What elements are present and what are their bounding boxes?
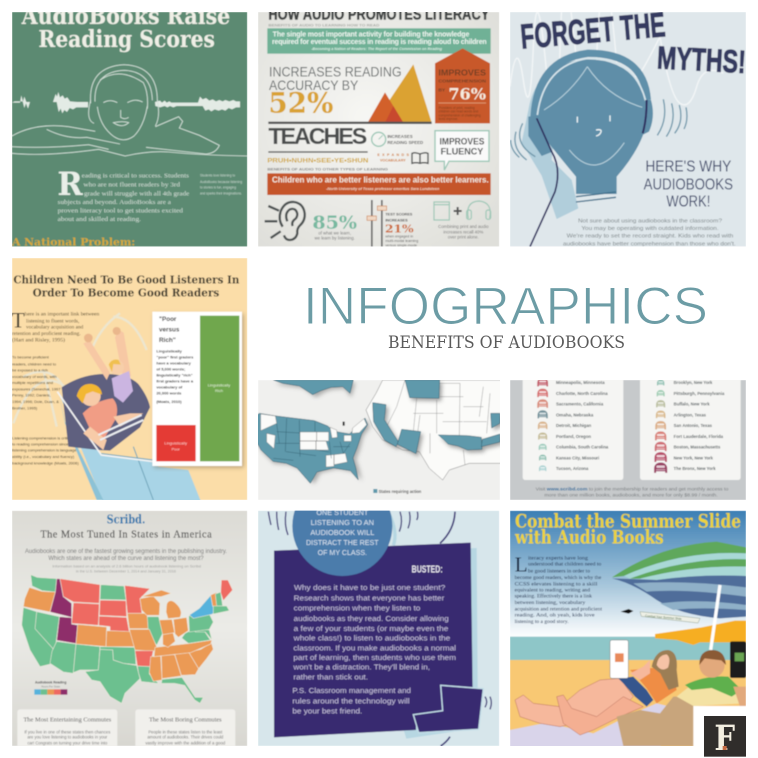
icon: print plus audio bbox=[434, 201, 491, 220]
text block: classroom note: We're ready to set the record straight. Kids who read with bbox=[567, 233, 733, 239]
label: busted: BUSTED: bbox=[412, 564, 443, 575]
panel: audiobooks raise reading scores bbox=[11, 2, 249, 248]
caption: print and audio bbox=[438, 224, 489, 240]
zig-zag corner bbox=[413, 685, 483, 733]
body text: speaking. Effectively there is a link bbox=[515, 593, 592, 600]
stat: reading accuracy 52% bbox=[268, 66, 402, 114]
drop cap: T bbox=[11, 307, 25, 332]
card: right city list: Fort Lauderdale, Florida bbox=[674, 434, 724, 439]
text block: reading is critical: about and skilled at reading. bbox=[58, 216, 141, 223]
bar: linguistically poor: Poor bbox=[171, 447, 181, 452]
chart: overlapping triangles bbox=[368, 64, 432, 123]
circle with myth text: AUDIOBOOK WILL bbox=[310, 528, 374, 537]
intro text: Which states are ahead of the curve and listening the most? bbox=[48, 556, 204, 562]
text block: listening comprehension: Listening comprehension is critical bbox=[12, 436, 73, 441]
text block: listening comprehension bbox=[12, 436, 79, 465]
callout: improves comprehension 76%: children can read words and bbox=[439, 110, 479, 114]
illustration: umbrella bbox=[612, 542, 746, 650]
heading: with Audio Books bbox=[514, 527, 664, 549]
subheading: BENEFITS OF AUDIO TO LEARNING HOW TO READ bbox=[268, 22, 379, 27]
card: most entertaining commutes: If you live in one of these states then chances bbox=[24, 729, 110, 734]
callout: improves comprehension 76%: BY bbox=[438, 88, 446, 94]
callout: improves comprehension 76%: texts improve. bbox=[439, 117, 458, 121]
graphic: sliders and 21% stat bbox=[367, 200, 418, 247]
stat: reading accuracy 52%: ACCURACY BY bbox=[269, 77, 359, 93]
body text: understood that children need to bbox=[528, 561, 601, 567]
bar: linguistically rich: Linguistically bbox=[208, 383, 230, 388]
illustration: pier bbox=[655, 621, 746, 645]
text block: become proficient: vocabulary of words, with bbox=[12, 374, 57, 379]
callout: improves fluency: IMPROVES bbox=[439, 136, 484, 146]
card title: versus bbox=[159, 326, 180, 333]
bar: linguistically rich bbox=[200, 316, 239, 461]
text block: reading is critical: proven literacy tool to get students excited bbox=[58, 207, 184, 214]
subheading: a national problem: A National Problem: bbox=[11, 235, 135, 248]
panel: cities listening ranking bbox=[510, 373, 746, 500]
quote band: required for eventual success in reading is reading aloud to children bbox=[272, 39, 487, 46]
logo: F badge bbox=[704, 716, 746, 758]
small us map bbox=[252, 413, 370, 484]
body text: classroom. If you make audiobooks a normal bbox=[293, 643, 456, 652]
text block: listening comprehension: ability (i.e., vocabulary and fluency) bbox=[12, 454, 75, 459]
illustration: audio waveform bbox=[12, 92, 240, 113]
body text: won't be a distraction. They'll blend in, bbox=[292, 663, 430, 672]
caption: print and audio: increases recall 40% bbox=[443, 229, 483, 234]
card: right city list: San Antonio, Texas bbox=[674, 423, 713, 428]
card: right city list: Buffalo, New York bbox=[674, 402, 710, 407]
drop cap: L bbox=[515, 553, 528, 577]
choropleth map of us states bbox=[22, 575, 233, 703]
text block: listening comprehension: background knowledge (Moats, 2006) bbox=[12, 460, 79, 465]
illustration: man on beach with phone bbox=[617, 641, 746, 746]
card: right city list: Arlington, Texas bbox=[674, 412, 707, 417]
icon: ear bbox=[265, 202, 305, 240]
text block: listening comprehension: to reading comprehension since bbox=[12, 442, 69, 447]
icon: book with expands vocabulary bbox=[377, 153, 428, 163]
card text: first graders have a bbox=[156, 378, 194, 383]
bar: linguistically poor: Linguistically bbox=[164, 441, 187, 446]
card: left city list: Charlotte, North Carolina bbox=[556, 391, 608, 396]
quote band bbox=[267, 28, 491, 54]
body text: listening to a good story. bbox=[515, 619, 569, 625]
circle with myth text: ONE STUDENT bbox=[316, 508, 369, 517]
heading: HOW AUDIO PROMOTES LITERACY bbox=[268, 6, 489, 23]
title: INFOGRAPHICS bbox=[303, 277, 708, 336]
card text bbox=[156, 348, 194, 404]
card: most boring commutes: amount of audiobooks. Their drives could bbox=[147, 735, 224, 740]
side note: and sparks their imaginations. bbox=[200, 192, 242, 196]
callout: improves fluency bbox=[435, 131, 489, 170]
heading: forget the myths: FORGET THE bbox=[519, 6, 667, 57]
side note: Students love listening to bbox=[200, 174, 235, 178]
heading: forget the myths bbox=[520, 12, 745, 74]
circle with myth text: LISTENING TO AN bbox=[311, 518, 374, 527]
text block: link between listening and fluency: retention and proficient reading. bbox=[12, 330, 81, 337]
map legend bbox=[34, 681, 67, 695]
text block: reading is critical bbox=[58, 172, 189, 223]
text block: link between listening and fluency: here is an important link between bbox=[25, 312, 99, 318]
card: most boring commutes: People in these states listen to the least bbox=[148, 729, 223, 734]
panel: most tuned in states bbox=[12, 511, 247, 753]
large us map bbox=[366, 380, 503, 480]
illustration: towel bbox=[510, 703, 670, 749]
card: left city list bbox=[523, 373, 623, 480]
cropped map fragment bbox=[273, 380, 355, 397]
illustration: roller coaster track bbox=[13, 313, 147, 460]
quote band: The single most important activity for building the knowledge bbox=[273, 32, 469, 39]
quote band: better learners: -North University of Texas professor emeritus Sara Lundsteen bbox=[326, 187, 440, 191]
card: right city list: New York, New York bbox=[674, 456, 714, 461]
map legend: Hours Per State bbox=[41, 684, 61, 688]
body text: Why does it have to be just one student? bbox=[294, 583, 445, 592]
card: right city list: Boston, Massachusetts bbox=[674, 445, 721, 450]
text block: become proficient: To become proficient bbox=[12, 355, 50, 360]
illustration: plane with banner bbox=[621, 609, 700, 623]
card: left city list: Portland, Oregon bbox=[556, 434, 591, 439]
card text: (Moats, 2010) bbox=[156, 399, 182, 404]
text block: classroom note bbox=[563, 219, 736, 247]
body text: Research shows that everyone has better bbox=[294, 593, 445, 602]
card: most entertaining commutes: The Most Entertaining Commutes bbox=[23, 716, 112, 723]
note bbox=[52, 564, 201, 573]
text block: become proficient bbox=[12, 355, 61, 410]
card: most boring commutes: The Most Boring Commutes bbox=[149, 716, 222, 723]
icon: book with expands vocabulary: VOCABULARY bbox=[380, 158, 406, 162]
text block: become proficient: be exposed to a rich bbox=[12, 368, 48, 373]
panel: forget the myths bbox=[510, 0, 747, 247]
bar: linguistically poor bbox=[156, 425, 196, 461]
text: here's why audiobooks work: AUDIOBOOKS bbox=[644, 176, 733, 193]
illustration: woman on beach with phone bbox=[515, 640, 679, 735]
stat: 85% bbox=[312, 212, 357, 241]
body text: a few of your students (or maybe even the bbox=[294, 624, 448, 633]
label: teaches bbox=[267, 127, 368, 164]
graphic: sliders and 21% stat: versus single-mode bbox=[385, 243, 417, 247]
bar: linguistically rich: Rich bbox=[215, 388, 223, 393]
body text: reading. And, oh yeah, kids love bbox=[515, 613, 595, 619]
body text: P.S. Classroom management and bbox=[292, 686, 411, 695]
drop cap: R bbox=[57, 167, 84, 203]
white corner bbox=[693, 706, 747, 748]
text block: become proficient: readers, children need to bbox=[12, 361, 57, 366]
body text: be good listeners in order to bbox=[528, 568, 590, 574]
text block: link between listening and fluency: (Hart and Risley, 1995) bbox=[12, 336, 65, 343]
card text: "poor" first graders bbox=[156, 354, 194, 359]
icon: stopwatch with reading speed: INCREASES bbox=[387, 134, 413, 139]
logo: F badge: F bbox=[714, 718, 735, 758]
illustration: waveform background bbox=[510, 12, 723, 106]
text block: link between listening and fluency bbox=[12, 312, 99, 343]
text block: become proficient: Brother, 1995) bbox=[12, 405, 38, 410]
card: most entertaining commutes: car! Congrats on turning your drive time into bbox=[27, 740, 108, 745]
text block: classroom note: You may be operating with outdated information. bbox=[581, 226, 719, 232]
stat: 85%: 85% bbox=[312, 212, 357, 233]
text block: reading is critical: eading is critical to success. Students bbox=[82, 172, 189, 179]
legend: States requiring action bbox=[379, 489, 422, 494]
panel: good listeners bbox=[11, 258, 247, 503]
text block: become proficient: multiple repetitions and bbox=[12, 380, 53, 385]
caption: print and audio: over print alone. bbox=[448, 235, 479, 240]
stat: reading accuracy 52%: INCREASES READING bbox=[269, 64, 402, 80]
graphic: sliders and 21% stat: multi-modal learning bbox=[385, 239, 418, 243]
divider bbox=[268, 122, 432, 124]
quote band: -Becoming a Nation of Readers: The Report of the Commission on Reading bbox=[311, 47, 443, 51]
panel: us maps of states requiring action bbox=[252, 380, 503, 500]
card text: vocabulary of bbox=[156, 384, 183, 389]
heading bbox=[13, 274, 240, 298]
body text bbox=[292, 583, 456, 715]
card: most boring commutes: vastly improve with the addition of a good bbox=[145, 740, 226, 745]
note: Information based on an analysis of 2.6 billion hours of audiobook listening on Scribd bbox=[52, 564, 201, 568]
card: left city list: Tucson, Arizona bbox=[556, 466, 589, 471]
quote band: better learners: Children who are better listeners are also better learners. bbox=[272, 176, 489, 185]
label: teaches: TEACHES bbox=[268, 123, 367, 149]
background shape bbox=[350, 548, 478, 739]
card: left city list: Detroit, Michigan bbox=[556, 423, 592, 428]
dark text panel bbox=[274, 543, 473, 737]
circle with myth text: OF MY CLASS. bbox=[318, 548, 367, 557]
body text: acquisition and retention and proficient bbox=[515, 605, 602, 612]
icon: stopwatch with reading speed: READING SPEED bbox=[387, 140, 423, 145]
text block: become proficient: 1994, 1996; Dole, Duan, & bbox=[12, 399, 59, 404]
heading: Order To Become Good Readers bbox=[33, 286, 219, 300]
card text: Linguistically bbox=[156, 348, 183, 353]
graphic: sliders and 21% stat: TEST SCORES bbox=[385, 212, 413, 216]
body text: rules around the technology will bbox=[292, 696, 410, 705]
heading: audiobooks raise reading scores: Reading Scores bbox=[38, 25, 215, 53]
text block: become proficient: Penny, 1992; Daniels, bbox=[12, 393, 51, 398]
heading: audiobooks raise reading scores: AudioBooks Raise bbox=[21, 2, 230, 30]
callout: improves comprehension 76%: Providers of print, reading bbox=[439, 106, 475, 110]
text: here's why audiobooks work: WORK! bbox=[666, 193, 710, 210]
text block: classroom note: audiobooks have better comprehension than those who don't. bbox=[563, 241, 736, 247]
text block: reading is critical: who are not fluent readers by 3rd bbox=[83, 182, 181, 189]
card: most boring commutes bbox=[135, 709, 235, 753]
card: most entertaining commutes bbox=[17, 709, 117, 753]
card: right city list: Pittsburgh, Pennsylvania bbox=[674, 391, 725, 396]
body text: CCSS elevates listening to a skill bbox=[515, 581, 598, 587]
graphic: sliders and 21% stat: INCREASES bbox=[385, 218, 408, 222]
footer text: more than one million books, audiobooks, and more for only $8.99 / month. bbox=[544, 492, 718, 497]
body text: equivalent to reading, writing and bbox=[515, 587, 590, 593]
card: left city list: Columbia, South Carolina bbox=[556, 445, 609, 450]
decorative arcs bbox=[268, 512, 491, 746]
panel: busted myth bbox=[258, 476, 499, 746]
map legend: Audiobook Reading bbox=[35, 681, 66, 685]
footer text bbox=[536, 487, 729, 497]
circle with myth text bbox=[292, 476, 392, 576]
heading bbox=[514, 510, 741, 549]
body text: be your best friend. bbox=[292, 706, 362, 715]
card: left city list: Sacramento, California bbox=[556, 402, 604, 407]
card: most entertaining commutes: are you love listening to audiobooks in your bbox=[27, 735, 108, 740]
subheading: other types of learning: BENEFITS OF AUDIO TO OTHER TYPES OF LEARNING bbox=[267, 167, 388, 172]
intro text bbox=[25, 549, 227, 562]
body text: whole class!) to listen to audiobooks in the bbox=[293, 634, 450, 643]
card title: "Poor bbox=[159, 316, 177, 323]
body text: iteracy experts have long bbox=[528, 555, 588, 561]
note: in the U.S. between December 1, 2014 and January 31, 2016 bbox=[76, 569, 176, 573]
intro text: Audiobooks are one of the fastest growing segments in the publishing industry. bbox=[25, 549, 227, 555]
card text: have a vocabulary bbox=[156, 360, 192, 365]
quote band: better learners bbox=[267, 173, 491, 195]
sand bbox=[510, 660, 746, 747]
body text: between listening, vocabulary bbox=[515, 600, 586, 606]
caption: print and audio: Combining print and audio bbox=[438, 224, 489, 229]
heading: Children Need To Be Good Listeners In bbox=[13, 272, 239, 286]
card: right city list: The Bronx, New York bbox=[674, 466, 716, 471]
graphic: sliders and 21% stat: 21% bbox=[385, 222, 414, 236]
side note bbox=[200, 174, 242, 196]
text block: reading is critical: grade will struggle with all 4th grade bbox=[84, 191, 189, 198]
text: here's why audiobooks work: HERE'S WHY bbox=[645, 159, 731, 176]
card text: linguistically "rich" bbox=[156, 372, 193, 377]
subtitle: BENEFITS OF AUDIOBOOKS bbox=[388, 333, 625, 352]
text block: reading is critical: subjects and beyond. AudioBooks are a bbox=[58, 199, 171, 206]
card: left city list: Omaha, Nebraska bbox=[556, 412, 594, 417]
text block: classroom note: Not sure about using audiobooks in the classroom? bbox=[578, 219, 722, 225]
body text: become good readers, which is why the bbox=[515, 575, 602, 581]
stat: reading accuracy 52%: 52% bbox=[268, 87, 333, 120]
sea bbox=[510, 637, 746, 661]
bar chart card: poor versus rich bbox=[152, 312, 244, 468]
footer text: Visit www.scribd.com to join the membership for readers and get monthly access to bbox=[536, 487, 729, 492]
heading: The Most Tuned In States in America bbox=[40, 529, 212, 540]
callout: improves comprehension 76%: 76% bbox=[448, 84, 486, 103]
illustration: girl resting on a book with headphones bbox=[12, 65, 249, 156]
body text bbox=[515, 555, 602, 625]
side note: to stories is fun, engaging bbox=[200, 186, 236, 190]
graphic: sliders and 21% stat: when engaged in bbox=[385, 235, 413, 239]
plus sign bbox=[454, 207, 462, 215]
body text: comprehension when they listen to bbox=[294, 604, 420, 613]
text block: become proficient: exposures (Senechal, 1997 bbox=[12, 386, 61, 391]
card text: of 5,000 words; bbox=[156, 366, 185, 371]
icon: stopwatch with reading speed bbox=[372, 132, 423, 146]
callout: improves comprehension 76%: IMPROVES bbox=[438, 67, 486, 77]
callout: improves comprehension 76%: COMPREHENSION bbox=[438, 79, 486, 85]
text block: listening comprehension: listening comprehension is language bbox=[12, 448, 77, 453]
illustration: children on a roller coaster car bbox=[57, 327, 202, 503]
card: right city list: Brooklyn, New York bbox=[674, 380, 713, 385]
card: left city list: Kansas City, Missouri bbox=[556, 456, 599, 461]
body text: part of learning, then students who use them bbox=[293, 653, 456, 662]
illustration: plane with banner: Combat Your Summer Slide bbox=[645, 614, 682, 621]
card: right city list bbox=[640, 373, 741, 480]
stat: 85%: we learn by listening. bbox=[314, 236, 355, 241]
card text: 20,000 words bbox=[156, 390, 182, 395]
panel: combat the summer slide bbox=[510, 510, 747, 749]
callout: improves comprehension 76% bbox=[435, 48, 490, 123]
callout: improves comprehension 76%: comprehension of challenging bbox=[439, 113, 481, 117]
card: left city list: Minneapolis, Minnesota bbox=[556, 380, 605, 385]
icon: sound waves bbox=[511, 99, 687, 160]
callout: improves fluency: FLUENCY bbox=[441, 146, 483, 156]
heading: audiobooks raise reading scores bbox=[20, 12, 230, 53]
logo: scribd: Scribd. bbox=[107, 512, 145, 526]
side note: AudioBooks because listening bbox=[200, 180, 242, 184]
icon: book with expands vocabulary: EXPANDS bbox=[377, 153, 410, 157]
label: teaches: PRUH•NUHN•SEE•YE•SHUN bbox=[267, 158, 369, 165]
circle with myth text: DISTRACT THE REST bbox=[306, 538, 379, 547]
card title bbox=[159, 316, 180, 344]
illustration: light bulb head with headphones bbox=[522, 53, 653, 247]
text block: link between listening and fluency: vocabulary acquisition and bbox=[26, 325, 83, 331]
stat: 85%: of what we learn, bbox=[318, 230, 351, 235]
text: here's why audiobooks work bbox=[644, 159, 733, 210]
panel: how audio promotes literacy bbox=[258, 6, 499, 247]
body text: rather than stick out. bbox=[293, 673, 368, 682]
card title: Rich" bbox=[159, 337, 176, 344]
body text: audiobooks as they read. Consider allowing bbox=[294, 614, 449, 623]
text block: link between listening and fluency: listening to fluent words, bbox=[26, 317, 80, 324]
